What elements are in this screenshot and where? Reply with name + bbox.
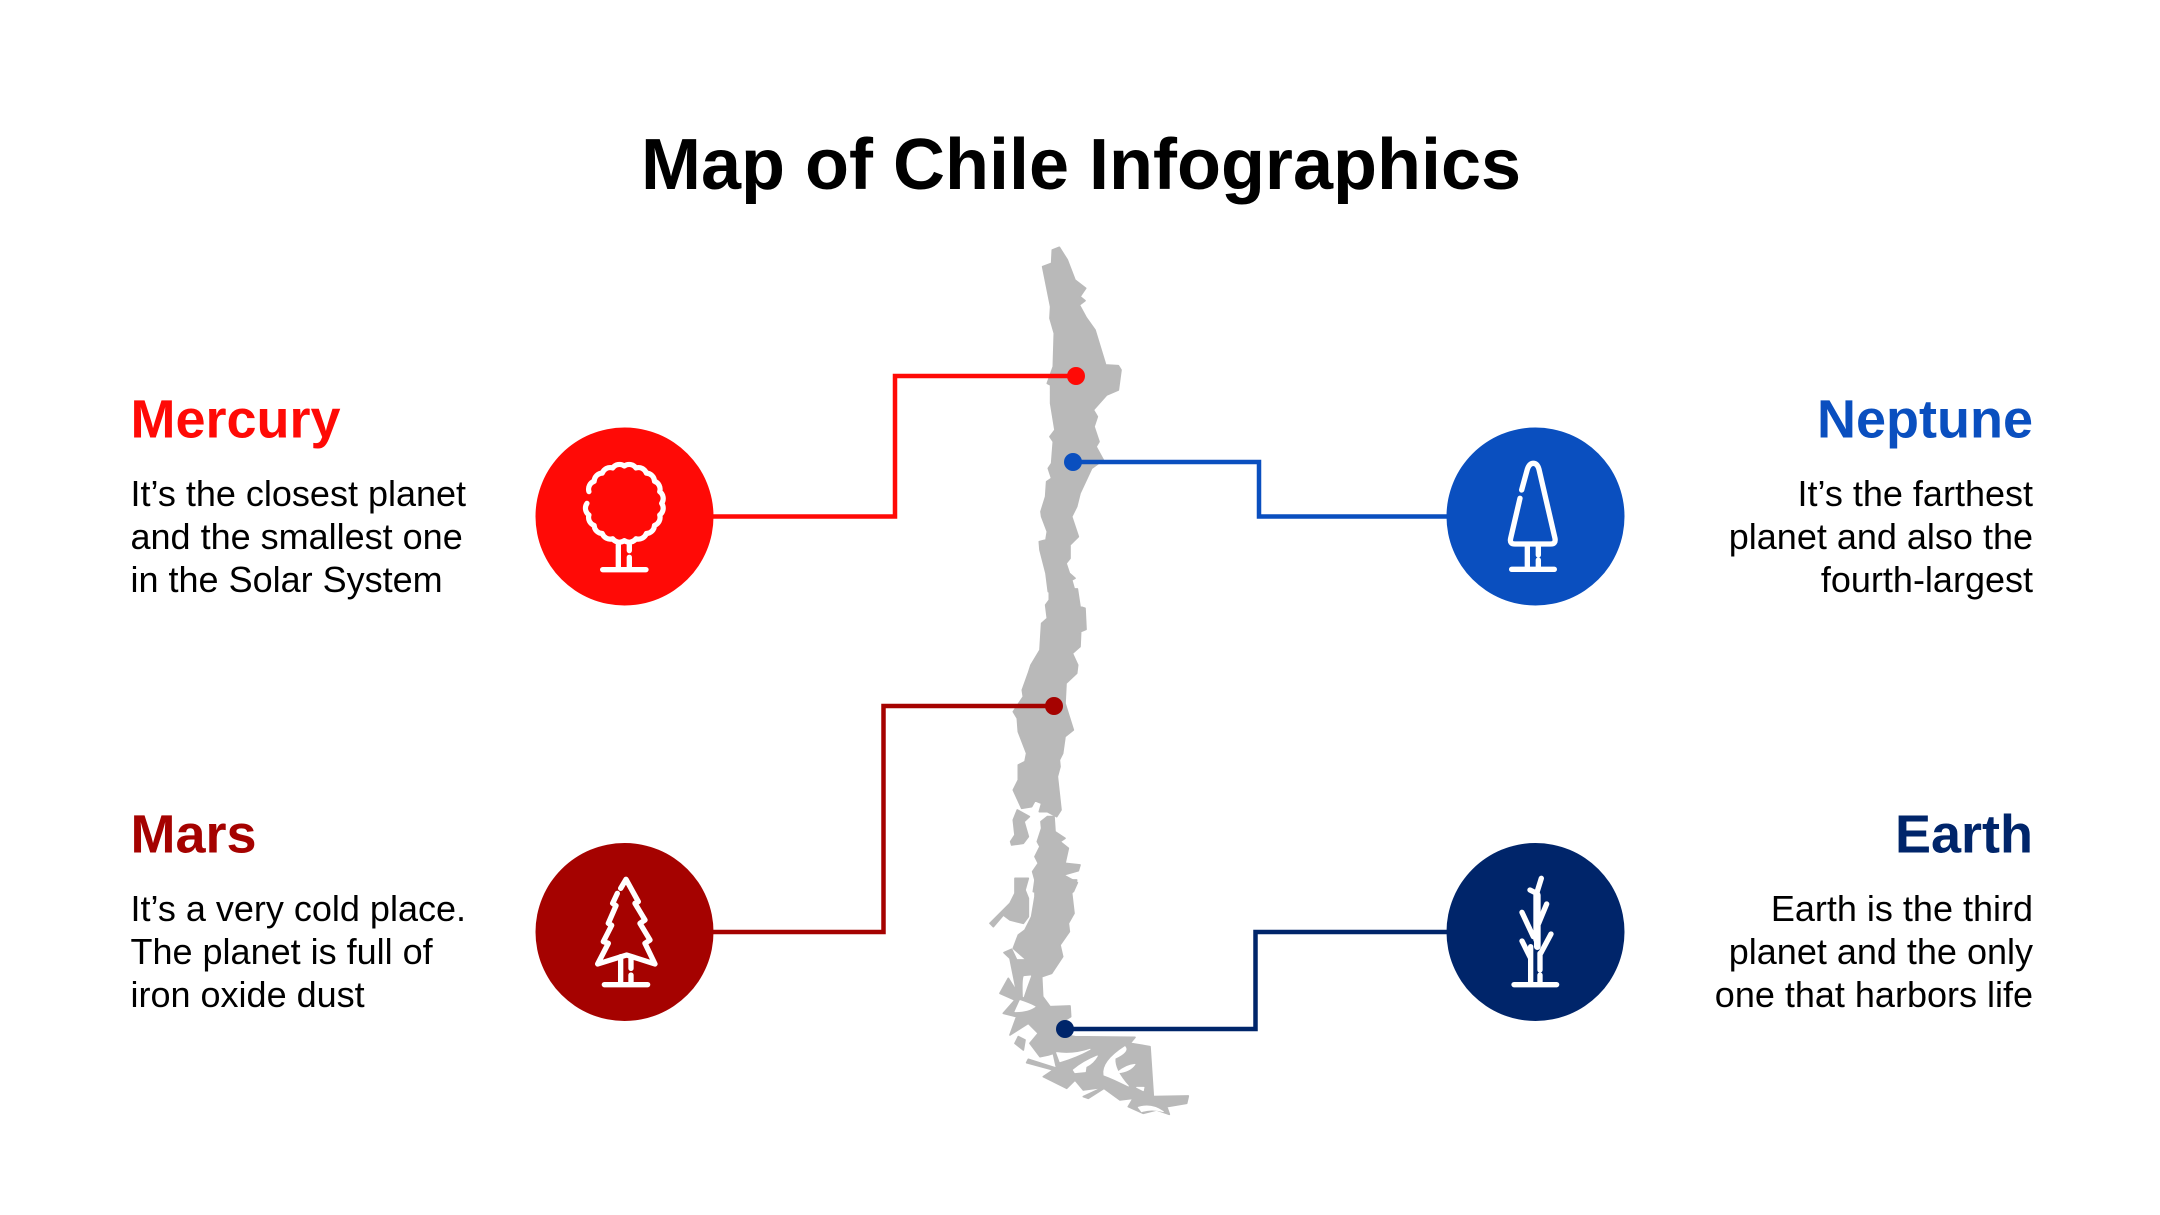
text block: Mars: [130, 804, 466, 1015]
marker: Mars: [1045, 697, 1063, 715]
marker: Neptune: [1064, 453, 1082, 471]
connector: Mercury: [713, 376, 1076, 516]
text block: Mercury: It’s the closest planet: [130, 473, 466, 514]
text block: Neptune: Neptune: [1817, 390, 2033, 450]
text block: Neptune: [1729, 390, 2033, 600]
text block: Mars: iron oxide dust: [130, 974, 365, 1015]
text block: Earth: Earth: [1895, 804, 2033, 864]
text block: Neptune: It’s the farthest: [1798, 473, 2033, 514]
icon: Neptune cypress tree: [1446, 428, 1624, 606]
text block: Neptune: planet and also the: [1729, 516, 2033, 557]
text block: Mercury: Mercury: [130, 390, 341, 450]
text block: Earth: planet and the only: [1729, 931, 2033, 972]
title: Map of Chile Infographics: [641, 125, 1521, 205]
map of Chile: [990, 247, 1188, 1114]
text block: Mercury: [130, 390, 466, 600]
marker: Mercury: [1067, 367, 1085, 385]
text block: Neptune: fourth-largest: [1821, 559, 2033, 600]
text block: Mars: The planet is full of: [130, 931, 434, 972]
text block: Mars: Mars: [130, 804, 257, 864]
connector: Neptune: [1073, 462, 1447, 516]
icon: Earth bare tree: [1446, 843, 1624, 1021]
text block: Earth: [1715, 804, 2033, 1015]
marker: Earth: [1056, 1020, 1074, 1038]
text block: Mercury: and the smallest one: [130, 516, 463, 557]
connector: Earth: [1065, 932, 1447, 1029]
text block: Mars: It’s a very cold place.: [130, 888, 466, 929]
icon: Mercury round tree: [536, 428, 714, 606]
text block: Earth: one that harbors life: [1715, 974, 2033, 1015]
icon: Mars pine tree: [536, 843, 714, 1021]
connector: Mars: [713, 706, 1054, 932]
text block: Earth: Earth is the third: [1771, 888, 2033, 929]
text block: Mercury: in the Solar System: [130, 559, 443, 600]
